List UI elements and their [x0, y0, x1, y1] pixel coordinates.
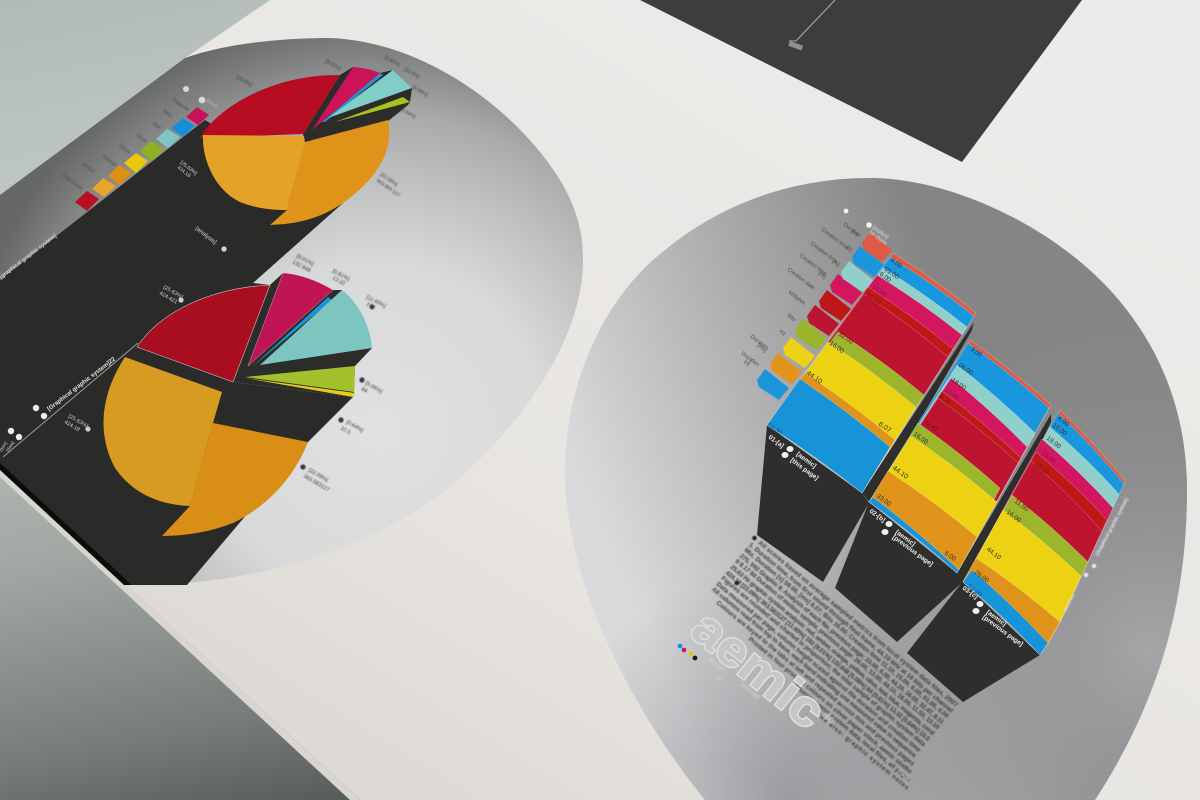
bottom pie labels — [291, 253, 387, 493]
column 2 values: 44.10 — [891, 465, 909, 481]
column 3 values: 13.00 — [966, 583, 983, 599]
legend labels: top pie: Amber — [81, 162, 97, 175]
column labels: [this page] — [789, 457, 820, 482]
top pie labels: [0.64%] — [399, 107, 417, 121]
aemic logo: aemic — [681, 599, 836, 739]
column 3 values: 13.10 — [1033, 461, 1050, 477]
legend labels: [m] — [850, 229, 860, 238]
logo strapline: 02 — [715, 675, 723, 683]
column 3 values: 19.00 — [1045, 435, 1062, 451]
bottom pie labels: 10.5 — [339, 426, 351, 436]
legend tabs — [757, 232, 892, 400]
top pie labels: [25.6%] — [235, 75, 253, 89]
dark panel labels: [analysis] — [194, 226, 217, 246]
text block notes: Colours are keyed to the tabs at left and repeated across this and previous pages — [715, 600, 916, 768]
dark panel labels: [25.63%] — [179, 160, 198, 177]
bottom pie dark labels: 424.18 — [63, 420, 81, 433]
slice: blue sliver — [252, 297, 332, 367]
logo strapline: design — [707, 656, 726, 674]
dark fan behind slices — [303, 67, 412, 143]
column 1 dark base — [757, 425, 869, 582]
page edge — [0, 468, 360, 800]
bottom pie labels: 13.32 — [331, 275, 346, 287]
silver circle left — [0, 38, 583, 585]
legend labels: [hr] — [817, 271, 827, 281]
legend labels: top pie: Red Green — [61, 173, 84, 192]
legend labels: Hz — [778, 329, 787, 338]
legend labels: [ms] — [756, 343, 768, 354]
column 3 values: 26.00 — [973, 569, 990, 585]
bottom pie dark labels: [25.63%] — [67, 414, 89, 430]
column 1 values: 11.10 — [865, 292, 882, 307]
top pie chart — [200, 67, 412, 225]
top pie labels: [0.81%] — [383, 55, 401, 69]
legend labels: M/Bytes — [787, 290, 806, 307]
column labels — [767, 434, 1024, 648]
legend labels: Creation date — [786, 267, 816, 291]
slice: teal — [328, 70, 412, 118]
slice: amber — [203, 135, 305, 210]
column 3 values: 44.10 — [985, 546, 1002, 562]
dark fan behind slices — [233, 273, 372, 397]
circle shade bottom — [565, 178, 1187, 800]
column 3 values: 11.50 — [1013, 498, 1030, 513]
silver circle right — [565, 178, 1187, 800]
logo strapline: concept — [739, 681, 761, 701]
column 1 values: 4.00 — [889, 257, 904, 270]
slice: magenta — [312, 67, 380, 130]
bottom pie labels: [11.60%] — [365, 294, 387, 310]
bottom pie dark labels: [Graphical graphic system]22 — [47, 356, 117, 413]
column labels: [previous page] — [891, 534, 934, 568]
legend swatches: top pie — [75, 107, 209, 211]
slice: magenta — [248, 273, 333, 366]
legend labels — [740, 222, 862, 368]
slice: crimson — [200, 75, 340, 138]
legend labels: [s] — [845, 245, 853, 253]
column 3 values: 16.00 — [1005, 509, 1022, 525]
text block notes — [690, 534, 971, 792]
right edge side text — [1062, 497, 1130, 613]
legend labels: top pie: Olive — [135, 133, 148, 144]
dark panel labels: 424.18 — [176, 165, 192, 179]
slice: orange — [270, 120, 389, 225]
dark backing shape — [0, 120, 353, 585]
text block notes: Figures are rounded and charted in proportion; the total sample of graphic system data — [719, 575, 927, 748]
slice: amber — [104, 357, 222, 506]
legend labels: Duration — [749, 334, 769, 351]
legend labels: top pie: Magenta — [171, 97, 190, 113]
column labels: 01-[a] — [767, 434, 785, 450]
top pie labels: [8.01%] — [324, 59, 342, 73]
legend labels: [m] — [831, 259, 841, 268]
legend labels: Duration — [842, 222, 862, 239]
bottom pie dark labels — [0, 285, 184, 453]
bottom pie labels: 192 — [365, 301, 376, 311]
logo registered mark: ®0 — [821, 711, 836, 726]
bottom pie labels: [0.64%] — [345, 420, 365, 434]
legend header — [844, 209, 890, 247]
top pie labels: [22.09%] — [379, 172, 399, 188]
logo strapline — [707, 656, 761, 701]
dark strip between columns two and three — [957, 414, 1051, 579]
column 1 values: 6.07 — [877, 421, 892, 435]
legend labels: top pie: Yellow — [117, 143, 132, 156]
bottom pie chart — [104, 273, 372, 536]
slice: olive — [245, 366, 355, 392]
column 2 values: 16.00 — [912, 431, 930, 446]
text block notes: Mix. Duration [s] 59.00, [ms] 6.07; Bits 16.00; Creation time 11.10, 15.00, 6.00, 01.00, 4.00 — [743, 547, 950, 720]
column 2 values: 32.47 — [922, 419, 940, 434]
slice: blue sliver — [322, 73, 383, 122]
legend labels: top pie: Orange — [101, 154, 118, 169]
bottom pie labels: [0.81%] — [331, 268, 351, 283]
right edge side text: columns — [1062, 593, 1077, 613]
column 2 values: 6.00 — [943, 550, 958, 563]
dark strip between columns one and two — [862, 322, 974, 502]
text block notes: 25.63 Hz graphic system analysis: red, amber, orange, yellow, olive, teal, blue, magenta, coral — [729, 564, 936, 737]
column 2 values: 33.00 — [875, 493, 893, 508]
legend header: for charts — [868, 230, 888, 247]
top pie labels: 363.583 127 — [375, 178, 401, 199]
slice: yellow sliver — [245, 378, 355, 397]
text block notes: See also: graphic system notes — [815, 711, 910, 792]
legend labels: Creation time — [809, 241, 839, 265]
column 2 bands — [869, 340, 1051, 573]
text block notes: 275. 592 Graphic 8. Analysis of each file, previous page: 33.00, 6.00, 44.10, 16.00, 32.47, 8.11 — [738, 553, 945, 726]
column 1 values: 15.00 — [870, 284, 888, 299]
column labels: 02-[b] — [868, 508, 886, 524]
column 3 dark base — [907, 577, 1040, 702]
bottom pie labels: [8.01%] — [295, 253, 315, 268]
slice: orange — [162, 423, 308, 536]
legend labels: Creation time — [798, 253, 828, 277]
panel: left pie charts circle — [0, 38, 583, 585]
spine shadow — [0, 463, 132, 585]
column labels: [aemic] — [795, 451, 817, 470]
bottom pie labels: [5.06%] — [364, 381, 384, 395]
column 3 values: 15.00 — [1040, 450, 1057, 466]
column 2 values: 8.11 — [938, 394, 952, 407]
slice: teal — [260, 290, 372, 365]
column 3 values — [966, 415, 1070, 599]
column 2 values — [875, 346, 984, 563]
slice: olive — [335, 97, 410, 122]
column 2 dark base — [835, 502, 966, 642]
right edge side text: [Graphical graphic system] — [1094, 497, 1130, 557]
legend labels: top pie: Teal — [151, 121, 162, 131]
text block notes: All columns read from top to base, each band indicating one measured value in sequence — [710, 586, 917, 760]
column 2 values: 06.00 — [957, 362, 975, 377]
column 2 values: 18.00 — [950, 377, 968, 392]
top pie labels — [235, 55, 429, 199]
column 2 values: 3.00 — [969, 346, 984, 359]
legend labels: Creation time — [820, 227, 850, 251]
column 1 values: 6.00 — [878, 271, 893, 284]
bottom pie labels: 363.583127 — [302, 474, 330, 493]
column labels: [aemic] — [894, 529, 916, 548]
column 1 bands — [767, 253, 976, 493]
column 1 values — [766, 257, 904, 437]
column 1 values: 44.10 — [805, 370, 823, 386]
dark panel labels — [0, 160, 227, 281]
text block notes: Data measured per page, column height scaled against file duration and creation time — [715, 581, 922, 754]
circle glow lower right — [565, 178, 1187, 800]
column 2 values: 15.00 — [943, 387, 961, 402]
top pie labels: [11.6%] — [403, 67, 421, 80]
legend heading dots: [total] — [205, 98, 219, 110]
legend header: [implied] — [871, 225, 890, 241]
bottom pie labels: 132.848 — [291, 259, 311, 274]
top pie labels: [5.06%] — [411, 85, 429, 99]
legend labels: top pie — [61, 97, 190, 192]
column 1 values: 01.00 — [883, 266, 901, 281]
bottom pie dark labels: 424.421 — [158, 291, 178, 306]
bottom pie labels: 84 — [360, 387, 368, 395]
legend labels: Duration — [740, 351, 760, 368]
column 1 values: 59.00 — [766, 422, 784, 437]
legend labels: Bits — [786, 313, 797, 323]
text block notes: Source: aemic system data, local files, all pages — [792, 683, 913, 784]
top right dark panel — [640, 0, 1082, 162]
column 3 values: 4.00 — [1056, 415, 1070, 428]
legend line — [3, 343, 138, 457]
legend heading dots — [183, 86, 219, 110]
column 1 values: 32.00 — [837, 331, 855, 346]
bottom pie dark labels: [data] — [5, 440, 15, 453]
text block notes: All scores based on average sampled metrics from local system data files, 2007 — [757, 540, 959, 709]
panel: right column chart circle — [565, 178, 1187, 800]
page number: Pages — [896, 769, 913, 784]
slice: crimson — [137, 285, 270, 382]
bottom pie dark labels: [25.63%] — [162, 285, 184, 301]
column 1 values: 16.00 — [828, 340, 846, 355]
dark panel labels: [graphical graphic system] — [0, 233, 58, 281]
text block notes: 424.18 [22.09%] 363.583127 [11.60%] 192 [8.01%] 132.848 [5.06%] 84 [0.81%] 13.32 [0.64%] 10.5 — [724, 570, 931, 743]
column 3 bands — [963, 410, 1125, 655]
legend labels: top pie: Blue — [162, 109, 174, 120]
column labels: 03-[c] — [961, 585, 979, 601]
bottom pie labels: [22.09%] — [307, 468, 329, 484]
text block notes: 9 9.17 94 Duration of motion sample, previous page: 26.00, 13.00, 44.10, 16.00, 11.50, 13.10 — [733, 558, 941, 732]
legend labels: [s] — [743, 359, 751, 367]
cmyk dots — [678, 644, 697, 660]
text block notes: 1. Duration time, from first sound through final frame, 44.10 kHz at 16 bits per channel — [747, 541, 955, 715]
column 3 values: 15.00 — [1051, 422, 1068, 438]
column labels: [aemic] — [985, 609, 1007, 628]
column labels: [previous page] — [981, 614, 1024, 648]
text block notes: Printed in four process colours on silver paper stock, aemic studio — [747, 636, 913, 775]
